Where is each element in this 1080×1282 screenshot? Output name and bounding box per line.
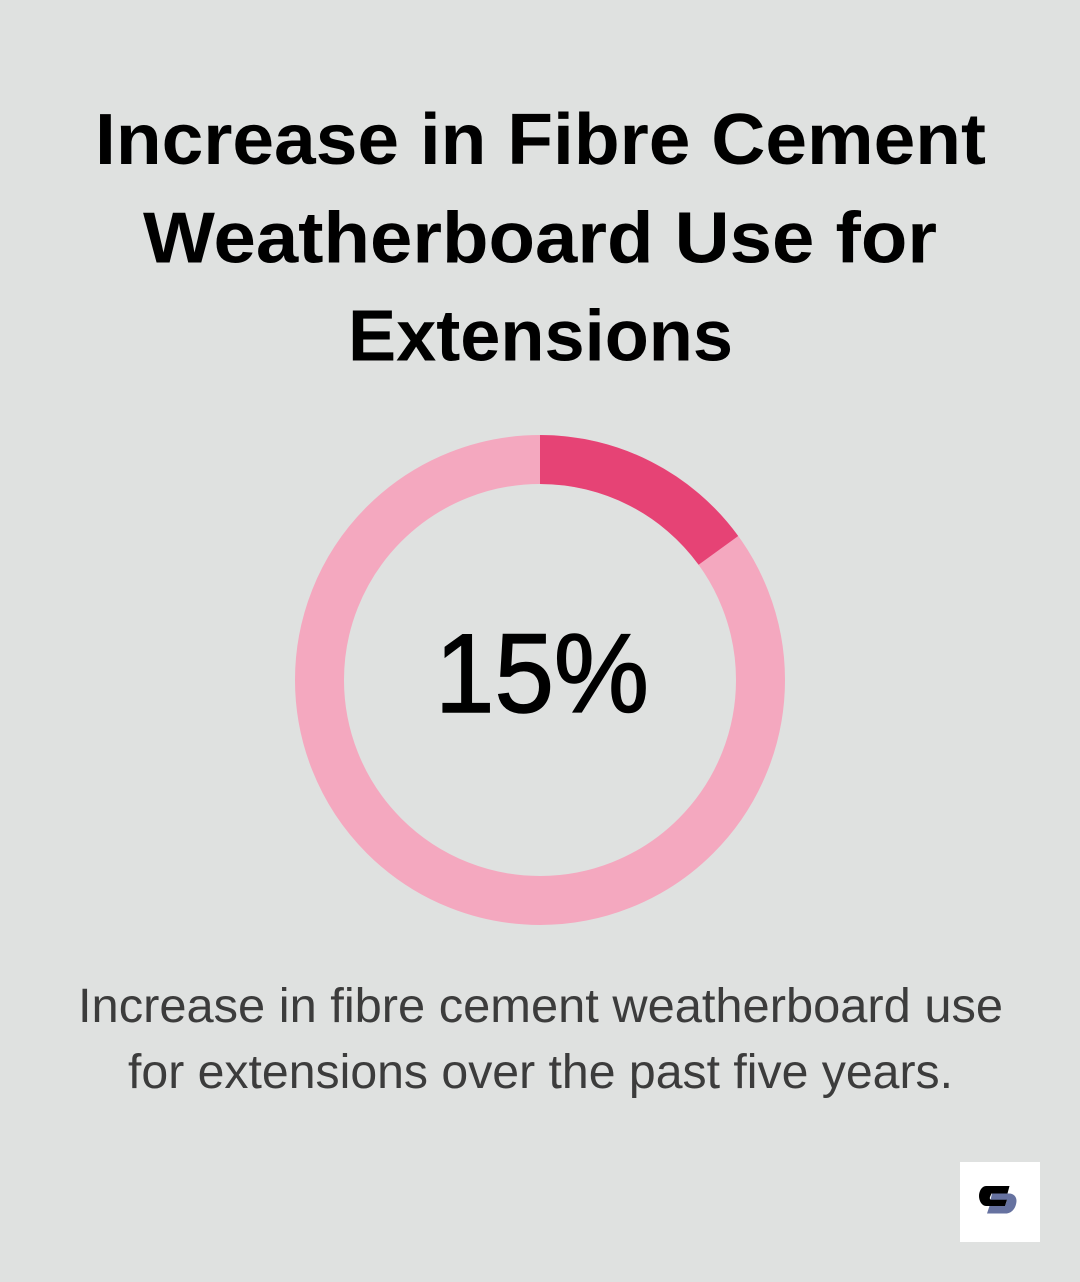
- logo badge: [960, 1162, 1040, 1242]
- description: for extensions over the past five years.: [128, 1045, 953, 1099]
- title: Weatherboard Use for: [143, 198, 937, 278]
- description: Increase in fibre cement weatherboard use: [78, 979, 1003, 1033]
- description: [78, 979, 1003, 1099]
- title: [95, 100, 986, 376]
- logo mark: black part: [979, 1186, 1010, 1206]
- title: Extensions: [348, 296, 733, 376]
- highlighted segment: 15%: [540, 435, 738, 565]
- logo mark: blue part: [987, 1194, 1016, 1214]
- donut chart: 15%: [320, 435, 760, 900]
- title: Increase in Fibre Cement: [95, 100, 986, 180]
- donut value: 15%: [435, 611, 649, 736]
